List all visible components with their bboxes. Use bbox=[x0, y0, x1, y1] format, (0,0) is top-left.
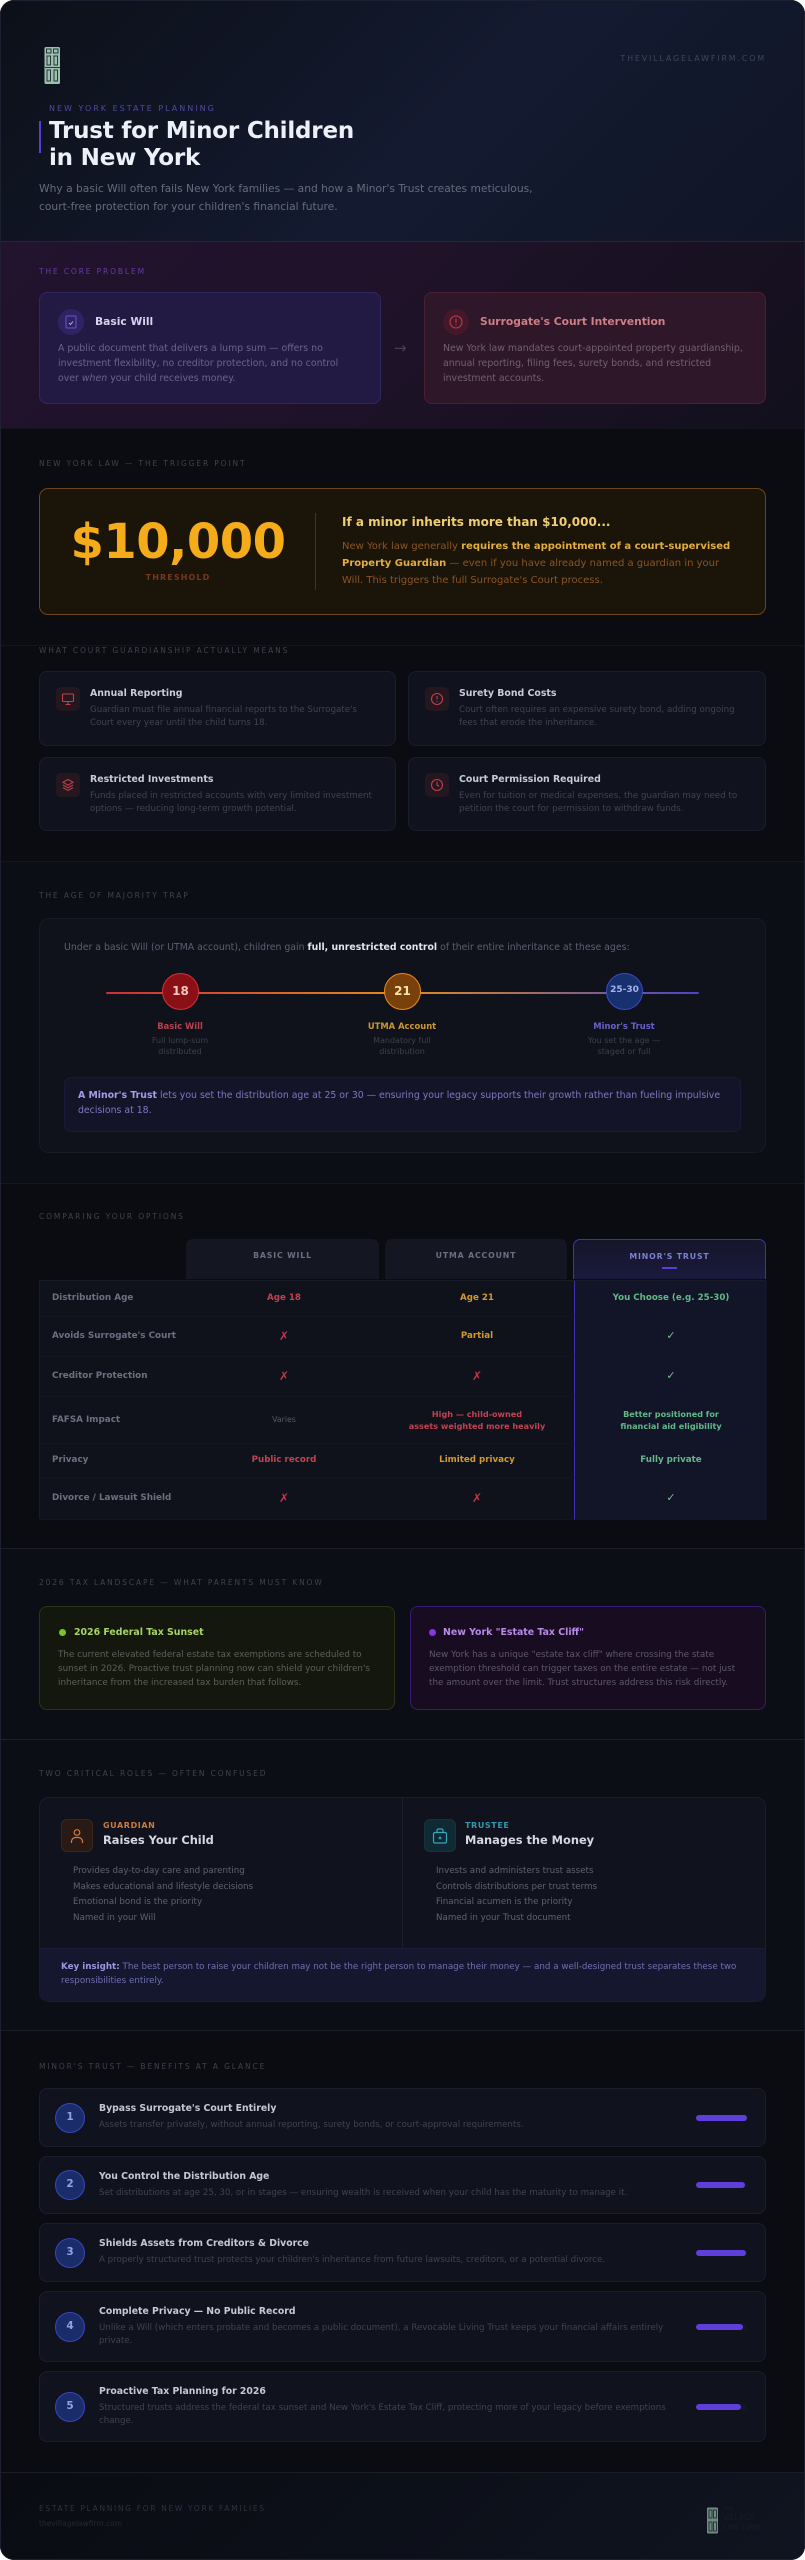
icon: alert bbox=[443, 309, 469, 335]
benefit 1: 1 bbox=[66, 2111, 74, 2123]
trustee list: Named in your Trust document bbox=[436, 1913, 571, 1923]
card body bbox=[443, 343, 743, 384]
title: in New York bbox=[49, 144, 200, 170]
body: the amount over the limit. Trust structures address this risk directly. bbox=[429, 1678, 728, 1688]
logo: THE bbox=[71, 47, 85, 55]
comparison table: Limited privacy bbox=[439, 1455, 515, 1465]
guardian list bbox=[73, 1866, 253, 1923]
big number: $10,000 bbox=[70, 514, 286, 570]
marker desc: Full lump-sum bbox=[152, 1036, 208, 1045]
subtitle: Why a basic Will often fails New York families — and how a Minor's Trust creates meticulous, bbox=[39, 182, 533, 195]
title: Surety Bond Costs bbox=[459, 688, 556, 699]
body bbox=[459, 705, 735, 728]
body bbox=[429, 1650, 735, 1688]
card body: annual reporting, filing fees, surety bonds, and restricted bbox=[443, 358, 711, 369]
comparison table: ✓ bbox=[666, 1329, 676, 1342]
comparison table: Fully private bbox=[640, 1455, 702, 1465]
trustee title: Manages the Money bbox=[465, 1833, 594, 1847]
marker desc bbox=[588, 1036, 660, 1056]
icon: alert bbox=[425, 687, 449, 711]
eyebrow: NEW YORK ESTATE PLANNING bbox=[49, 104, 216, 113]
marker: 25-30: 25-30 bbox=[610, 985, 639, 995]
key insight bbox=[40, 1948, 767, 2003]
callout: A Minor's Trust lets you set the distribution age at 25 or 30 — ensuring your legacy supports their growth rather than fueling impulsive bbox=[78, 1090, 720, 1101]
body: Court every year until the child turns 18. bbox=[90, 718, 267, 728]
comparison table: Public record bbox=[252, 1455, 316, 1465]
title bbox=[49, 118, 354, 170]
benefit 5: Structured trusts address the federal tax sunset and New York's Estate Tax Cliff, protecting more of your legacy before exemptions bbox=[99, 2403, 666, 2413]
column header: basic will: BASIC WILL bbox=[253, 1251, 312, 1260]
callout bbox=[64, 1077, 741, 1132]
key insight: Key insight: The best person to raise your children may not be the right person to manage their money — and a well-designed trust separates these two bbox=[61, 1962, 736, 1972]
logo: LAW FIRM bbox=[71, 70, 123, 82]
section label: THE AGE OF MAJORITY TRAP bbox=[39, 891, 190, 900]
marker desc bbox=[373, 1036, 431, 1056]
guardian list: Provides day-to-day care and parenting bbox=[73, 1866, 245, 1876]
marker: 18: 18 bbox=[172, 984, 189, 998]
section label: COMPARING YOUR OPTIONS bbox=[39, 1212, 185, 1221]
comparison table: ✗ bbox=[279, 1369, 289, 1383]
card: court permission bbox=[408, 757, 766, 831]
icon: monitor bbox=[56, 687, 80, 711]
card: basic will bbox=[39, 292, 381, 404]
benefit 2 bbox=[39, 2156, 766, 2214]
benefit 4: private. bbox=[99, 2336, 132, 2346]
logo: VILLAGE bbox=[71, 56, 115, 68]
body: New York law generally requires the appointment of a court-supervised bbox=[342, 541, 730, 552]
benefit 2: 2 bbox=[66, 2178, 74, 2190]
comparison table: financial aid eligibility bbox=[620, 1421, 722, 1431]
benefit 3 bbox=[39, 2223, 766, 2282]
marker desc: You set the age — bbox=[588, 1036, 660, 1045]
callout: decisions at 18. bbox=[78, 1105, 152, 1116]
card body: over when your child receives money. bbox=[58, 373, 235, 384]
icon: document bbox=[58, 309, 84, 335]
panel: core problem bbox=[0, 242, 805, 428]
benefit 4: 4 bbox=[66, 2320, 74, 2332]
card title: Basic Will bbox=[95, 315, 153, 328]
heading: If a minor inherits more than $10,000... bbox=[342, 515, 610, 529]
icon: layers bbox=[56, 773, 80, 797]
marker label: basic will: Basic Will bbox=[157, 1021, 203, 1031]
benefit 1: Bypass Surrogate's Court Entirely bbox=[99, 2103, 276, 2114]
comparison table: Partial bbox=[461, 1331, 493, 1341]
dot bbox=[429, 1629, 436, 1636]
card body: investment accounts. bbox=[443, 373, 544, 384]
comparison table: Age 21 bbox=[460, 1293, 494, 1303]
panel: guardianship bbox=[0, 645, 805, 861]
column header: minor's trust: MINOR'S TRUST bbox=[629, 1252, 710, 1261]
benefit 2: You Control the Distribution Age bbox=[99, 2171, 269, 2182]
body: Funds placed in restricted accounts with very limited investment bbox=[90, 791, 372, 801]
comparison table: You Choose (e.g. 25-30) bbox=[613, 1293, 729, 1303]
benefit 1 bbox=[39, 2088, 766, 2147]
comparison table: ✓ bbox=[666, 1369, 676, 1382]
column header: basic will bbox=[186, 1239, 379, 1279]
benefit 5: change. bbox=[99, 2416, 134, 2426]
section label: TWO CRITICAL ROLES — OFTEN CONFUSED bbox=[39, 1769, 267, 1778]
title: Restricted Investments bbox=[90, 774, 213, 785]
card: annual reporting bbox=[39, 671, 396, 746]
trustee list bbox=[436, 1866, 597, 1923]
marker desc bbox=[152, 1036, 208, 1056]
section label: WHAT COURT GUARDIANSHIP ACTUALLY MEANS bbox=[39, 646, 289, 655]
benefit 3: Shields Assets from Creditors & Divorce bbox=[99, 2238, 309, 2249]
intro: Under a basic Will (or UTMA account), children gain full, unrestricted control of their entire inheritance at these ages: bbox=[64, 942, 630, 953]
body bbox=[459, 791, 737, 814]
subtitle: court-free protection for your children's financial future. bbox=[39, 200, 338, 212]
body bbox=[58, 1650, 370, 1688]
card body bbox=[58, 343, 338, 384]
guardian list: Named in your Will bbox=[73, 1913, 156, 1923]
body: New York has a unique "estate tax cliff" where crossing the state bbox=[429, 1650, 714, 1660]
comparison table: Age 18 bbox=[267, 1293, 301, 1303]
icon: person bbox=[61, 1819, 93, 1852]
body: options — reducing long-term growth potential. bbox=[90, 804, 297, 814]
body: Property Guardian — even if you have already named a guardian in your bbox=[342, 558, 719, 569]
title: New York "Estate Tax Cliff" bbox=[443, 1627, 584, 1638]
benefit 4 bbox=[39, 2291, 766, 2362]
divider bbox=[402, 1798, 403, 1948]
trustee list: Controls distributions per trust terms bbox=[436, 1882, 597, 1892]
comparison table: ✗ bbox=[279, 1491, 289, 1505]
trustee tag: TRUSTEE bbox=[465, 1821, 509, 1830]
body: Court often requires an expensive surety bond, adding ongoing bbox=[459, 705, 735, 715]
benefit 2: Set distributions at age 25, 30, or in stages — ensuring wealth is received when your child has the maturity to manage it. bbox=[99, 2188, 627, 2198]
comparison table: Varies bbox=[272, 1415, 296, 1424]
body: petition the court for permission to withdraw funds. bbox=[459, 804, 683, 814]
panel: benefits bbox=[0, 2030, 805, 2472]
body: The current elevated federal estate tax exemptions are scheduled to bbox=[58, 1650, 362, 1660]
section label: 2026 TAX LANDSCAPE — WHAT PARENTS MUST KNOW bbox=[39, 1578, 324, 1587]
section label: NEW YORK LAW — THE TRIGGER POINT bbox=[39, 459, 246, 468]
body bbox=[90, 705, 357, 728]
card body: investment flexibility, no creditor protection, and no control bbox=[58, 358, 338, 369]
comparison table: FAFSA Impact bbox=[52, 1415, 120, 1425]
column header: minor's trust bbox=[573, 1239, 766, 1279]
guardian title: Raises Your Child bbox=[103, 1833, 214, 1847]
marker: 25-30 bbox=[606, 973, 643, 1010]
timeline panel bbox=[39, 918, 766, 1153]
roles card bbox=[39, 1797, 766, 2002]
body: Even for tuition or medical expenses, the guardian may need to bbox=[459, 791, 737, 801]
marker desc: distribution bbox=[379, 1047, 425, 1056]
body: Will. This triggers the full Surrogate's Court process. bbox=[342, 575, 603, 586]
comparison table: Creditor Protection bbox=[52, 1371, 147, 1381]
logo bbox=[44, 47, 123, 84]
icon: briefcase bbox=[424, 1819, 456, 1852]
comparison table: Better positioned for bbox=[623, 1409, 719, 1419]
title: Trust for Minor Children bbox=[49, 118, 354, 144]
body: Guardian must file annual financial reports to the Surrogate's bbox=[90, 705, 357, 715]
card title: Surrogate's Court Intervention bbox=[480, 315, 665, 328]
benefit 3: 3 bbox=[66, 2246, 74, 2258]
marker: 18 bbox=[162, 973, 199, 1010]
panel: 2026 tax landscape bbox=[0, 1548, 805, 1739]
footer bbox=[0, 2472, 805, 2560]
column header: utma bbox=[385, 1239, 567, 1279]
title: 2026 Federal Tax Sunset bbox=[74, 1627, 204, 1638]
guardian list: Makes educational and lifestyle decisions bbox=[73, 1882, 253, 1892]
marker desc: staged or full bbox=[598, 1047, 650, 1056]
card body: New York law mandates court-appointed property guardianship, bbox=[443, 343, 743, 354]
timeline line bbox=[106, 992, 699, 994]
benefit 5 bbox=[39, 2371, 766, 2442]
marker label: minor's trust: Minor's Trust bbox=[593, 1021, 655, 1031]
marker label: utma: UTMA Account bbox=[368, 1021, 436, 1031]
trustee list: Invests and administers trust assets bbox=[436, 1866, 593, 1876]
panel: age of majority bbox=[0, 861, 805, 1183]
accent bar bbox=[39, 121, 41, 153]
benefit 4: Unlike a Will (which enters probate and becomes a public document), a Revocable Living Trust keeps your financial affairs entirely bbox=[99, 2323, 663, 2333]
threshold label: THRESHOLD bbox=[146, 573, 210, 582]
card: surrogate's court bbox=[424, 292, 766, 404]
dot bbox=[59, 1629, 66, 1636]
comparison table: ✗ bbox=[472, 1491, 482, 1505]
benefit 4: Complete Privacy — No Public Record bbox=[99, 2306, 296, 2317]
panel: two critical roles bbox=[0, 1739, 805, 2030]
icon: clock bbox=[425, 773, 449, 797]
benefit 1: Assets transfer privately, without annual reporting, surety bonds, or court-approval requirements. bbox=[99, 2120, 524, 2130]
body bbox=[342, 541, 730, 586]
body: exemption threshold can trigger taxes on the entire estate — not just bbox=[429, 1664, 735, 1674]
benefit 3: A properly structured trust protects your children's inheritance from future lawsuits, creditors, or a potential divorce. bbox=[99, 2255, 605, 2265]
comparison table: Avoids Surrogate's Court bbox=[52, 1331, 176, 1341]
comparison table bbox=[39, 1280, 766, 1519]
comparison table: ✗ bbox=[472, 1369, 482, 1383]
card body: A public document that delivers a lump sum — offers no bbox=[58, 343, 323, 354]
comparison table: Privacy bbox=[52, 1455, 88, 1465]
comparison table: ✗ bbox=[279, 1329, 289, 1343]
panel: trigger point bbox=[0, 428, 805, 645]
benefit 5: Proactive Tax Planning for 2026 bbox=[99, 2386, 266, 2397]
title: Annual Reporting bbox=[90, 688, 183, 699]
footer logo: VILLAGE bbox=[723, 2513, 754, 2522]
footer logo bbox=[707, 2507, 760, 2534]
footer logo: THE bbox=[723, 2507, 733, 2513]
comparison table: Divorce / Lawsuit Shield bbox=[52, 1493, 171, 1503]
comparison table: ✓ bbox=[666, 1491, 676, 1504]
trustee list: Financial acumen is the priority bbox=[436, 1897, 573, 1907]
threshold callout bbox=[39, 488, 766, 615]
guardian list: Emotional bond is the priority bbox=[73, 1897, 202, 1907]
marker desc: Mandatory full bbox=[373, 1036, 431, 1045]
subtitle bbox=[39, 182, 533, 212]
footer logo: LAW FIRM bbox=[723, 2523, 760, 2532]
comparison table: High — child-owned bbox=[432, 1409, 522, 1419]
column header: utma: UTMA ACCOUNT bbox=[436, 1251, 516, 1260]
comparison table: assets weighted more heavily bbox=[409, 1421, 545, 1431]
body: fees that erode the inheritance. bbox=[459, 718, 597, 728]
card: estate tax cliff bbox=[410, 1606, 766, 1710]
card: federal tax sunset bbox=[39, 1606, 395, 1710]
body bbox=[90, 791, 372, 814]
footer url: thevillagelawfirm.com bbox=[39, 2519, 122, 2528]
body: sunset in 2026. Proactive trust planning now can shield your children's bbox=[58, 1664, 370, 1674]
key insight: responsibilities entirely. bbox=[61, 1976, 164, 1986]
header section bbox=[0, 0, 805, 242]
arrow: → bbox=[394, 339, 407, 357]
comparison table: Distribution Age bbox=[52, 1293, 133, 1303]
title: Court Permission Required bbox=[459, 774, 601, 785]
website url: THEVILLAGELAWFIRM.COM bbox=[620, 54, 766, 63]
card: restricted investments bbox=[39, 757, 396, 831]
divider bbox=[315, 513, 316, 590]
marker desc: distributed bbox=[158, 1047, 202, 1056]
marker: 21: 21 bbox=[394, 984, 411, 998]
section label: MINOR'S TRUST — BENEFITS AT A GLANCE bbox=[39, 2062, 266, 2071]
section label: THE CORE PROBLEM bbox=[39, 267, 146, 276]
guardian tag: GUARDIAN bbox=[103, 1821, 155, 1830]
body: inheritance from the increased tax burden that follows. bbox=[58, 1678, 301, 1688]
card: surety bond bbox=[408, 671, 766, 746]
footer tagline: ESTATE PLANNING FOR NEW YORK FAMILIES bbox=[39, 2504, 266, 2513]
panel: comparison bbox=[0, 1183, 805, 1548]
marker: 21 bbox=[384, 973, 421, 1010]
benefit 5: 5 bbox=[66, 2400, 74, 2412]
